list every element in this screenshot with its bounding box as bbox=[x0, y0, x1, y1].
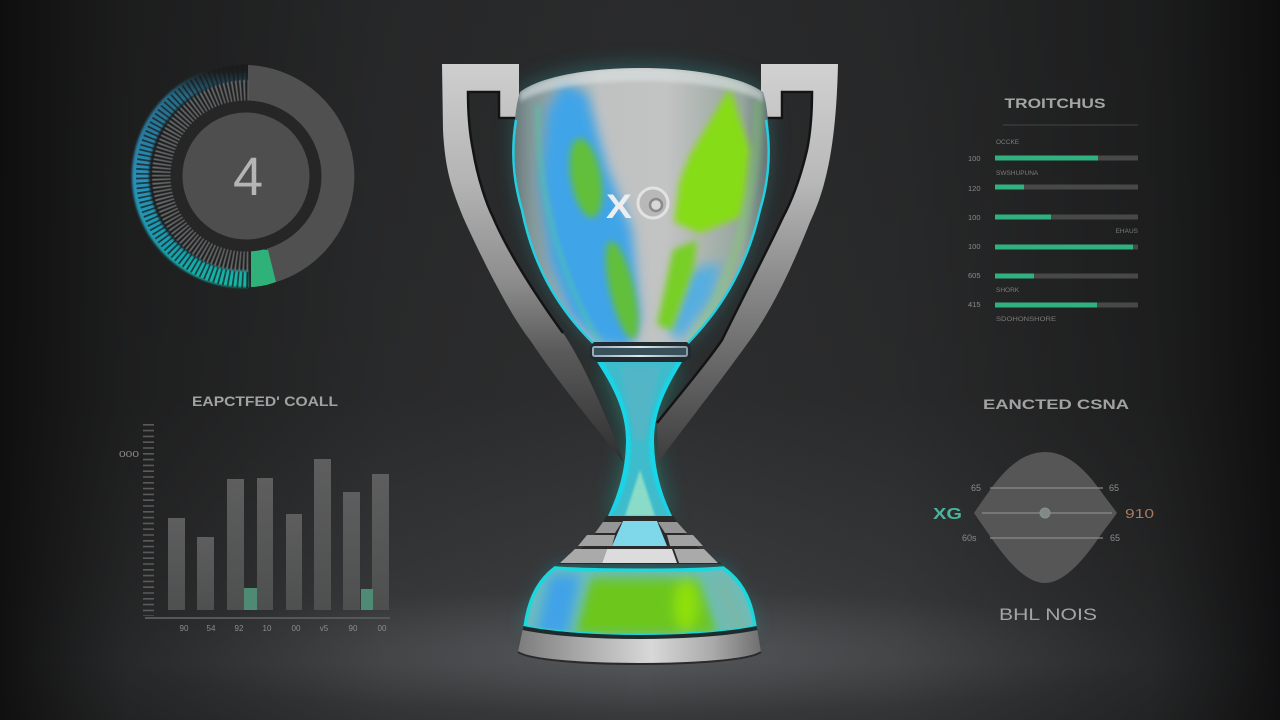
gauge tick base bbox=[137, 65, 248, 287]
stem bbox=[597, 362, 682, 516]
bar row 6 bbox=[968, 287, 1138, 323]
left handle bbox=[442, 64, 624, 463]
left handle inner shadow bbox=[468, 92, 563, 333]
bar row 5: 605 bbox=[968, 271, 981, 280]
panel: progress bars bbox=[968, 95, 1139, 323]
label left xG: XG bbox=[933, 506, 962, 523]
progress heading: TROITCHUS bbox=[1004, 95, 1106, 111]
gauge radial tick gaps bbox=[157, 85, 248, 267]
diamond heading: EANCTED CSNA bbox=[983, 396, 1129, 412]
diamond labels: 65 bbox=[1110, 533, 1120, 543]
bar row 4: EHAUS bbox=[1116, 228, 1139, 235]
diamond lines bbox=[982, 488, 1112, 538]
donut gauge bbox=[137, 65, 354, 287]
chart x labels: 00 bbox=[378, 624, 387, 633]
bowl bbox=[505, 60, 775, 350]
bar row 2: 120 bbox=[968, 184, 981, 193]
chart x labels: 10 bbox=[263, 624, 272, 633]
diamond labels: 65 bbox=[1109, 483, 1119, 493]
gauge dark ring bbox=[176, 106, 316, 246]
dome bbox=[523, 566, 757, 635]
diamond caption: BHL NOIS bbox=[999, 605, 1097, 624]
bar row 1 bbox=[968, 139, 1138, 163]
bowl xG label bbox=[606, 188, 668, 226]
bar row 2 bbox=[968, 170, 1138, 193]
bowl xG label: X bbox=[606, 188, 632, 226]
pedestal tiers bbox=[558, 516, 722, 564]
gauge value: 4 bbox=[233, 147, 263, 207]
gauge gray segment bbox=[246, 65, 354, 282]
chart x labels: 92 bbox=[235, 624, 244, 633]
bar row 1: 100 bbox=[968, 154, 981, 163]
bar row 4 bbox=[968, 228, 1139, 251]
bar row 3: 100 bbox=[968, 213, 981, 222]
trophy bbox=[442, 60, 838, 664]
chart y label: 000 bbox=[119, 450, 140, 459]
bar row 3 bbox=[968, 213, 1138, 222]
chart heading: EAPCTFED' COALL bbox=[192, 393, 338, 409]
chart x labels: v5 bbox=[320, 624, 329, 633]
bar row 5 bbox=[968, 271, 1138, 280]
trophy glow bbox=[514, 65, 769, 627]
collar bbox=[590, 342, 691, 362]
bar row 6: SHORK bbox=[996, 287, 1020, 294]
diamond centre dot bbox=[1040, 508, 1050, 518]
diamond labels bbox=[962, 483, 1120, 543]
base plate bbox=[518, 628, 761, 664]
bar row 4: 100 bbox=[968, 242, 981, 251]
chart x labels: 00 bbox=[292, 624, 301, 633]
gauge radial ticks bbox=[163, 91, 248, 261]
diamond labels: 65 bbox=[971, 483, 981, 493]
chart x labels bbox=[180, 624, 387, 633]
bar row 1: OCCKE bbox=[996, 139, 1020, 146]
right handle bbox=[657, 64, 838, 462]
chart x labels: 90 bbox=[349, 624, 358, 633]
bar row 6: SDOHONSHORE bbox=[996, 316, 1057, 323]
panel: bar chart bbox=[119, 393, 390, 633]
label right value: 910 bbox=[1125, 506, 1154, 521]
diamond labels: 60s bbox=[962, 533, 977, 543]
chart y axis ticks bbox=[143, 424, 154, 616]
diamond shape bbox=[974, 452, 1117, 583]
bar row 2: SWSHUPUNA bbox=[996, 170, 1039, 177]
chart x labels: 54 bbox=[207, 624, 216, 633]
gauge green segment bbox=[251, 248, 276, 287]
bar row 6: 415 bbox=[968, 300, 981, 309]
chart green highlights bbox=[244, 588, 373, 610]
chart bars bbox=[168, 459, 389, 610]
gauge coloured outer ticks bbox=[140, 73, 248, 279]
right handle inner shadow bbox=[657, 92, 812, 423]
panel: diamond chart bbox=[933, 396, 1154, 624]
chart x labels: 90 bbox=[180, 624, 189, 633]
